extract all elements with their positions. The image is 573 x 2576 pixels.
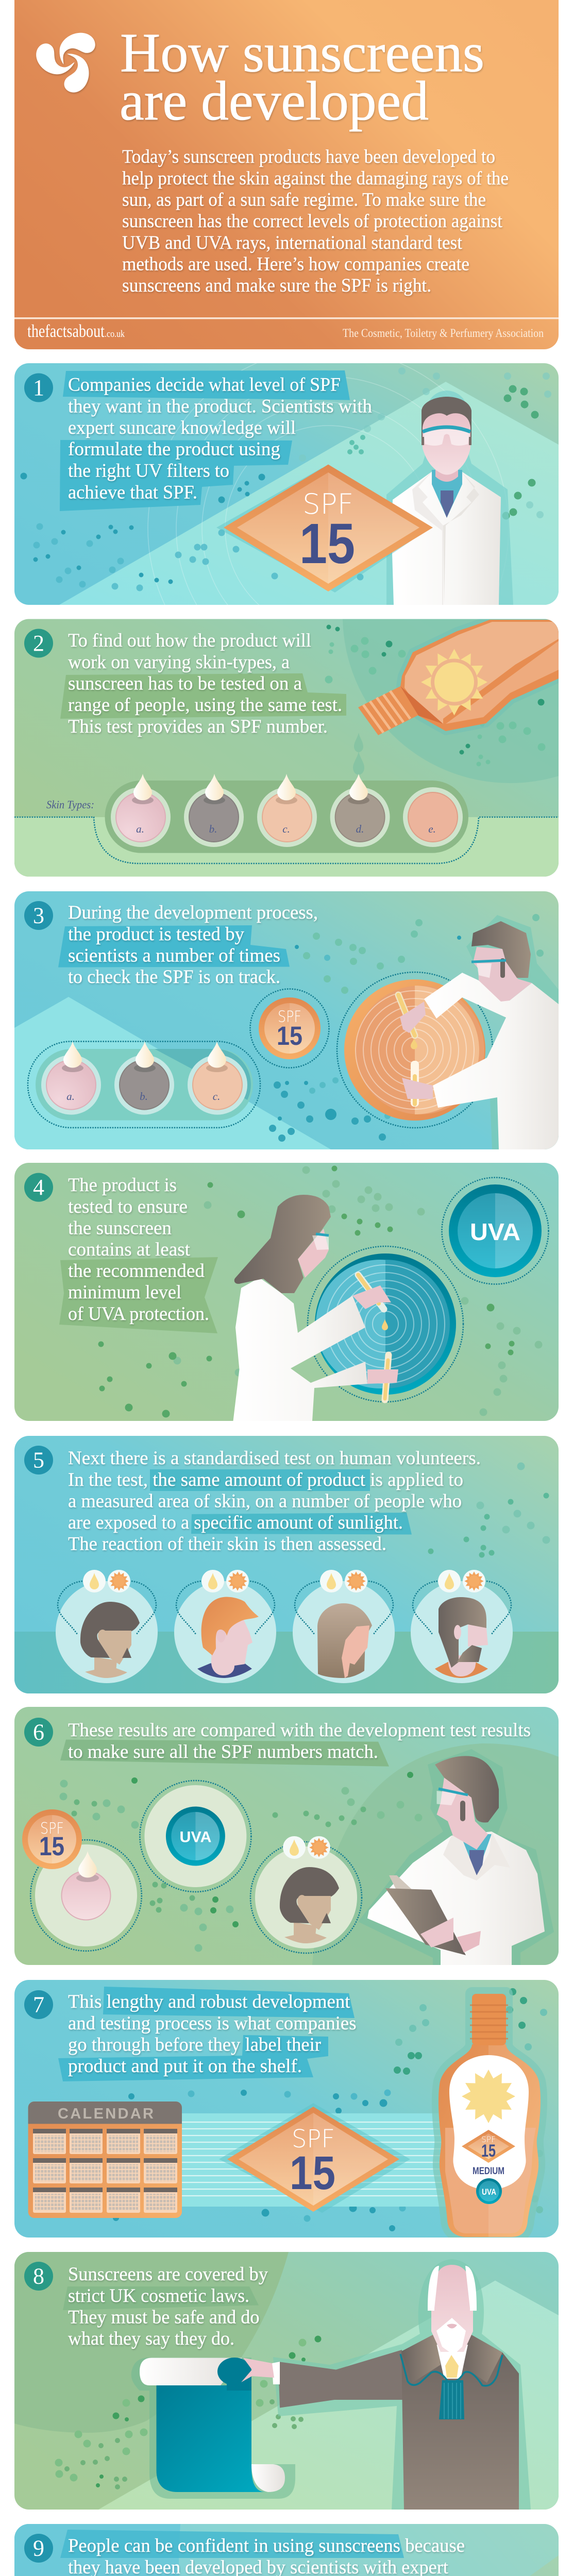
step 8 text: They must be safe and do xyxy=(68,2307,260,2328)
step 7 text: product and put it on the shelf. xyxy=(68,2056,302,2077)
SPF 15 badge: SPF xyxy=(40,1820,64,1838)
skin sample tray xyxy=(28,1041,260,1128)
dots xyxy=(24,371,548,588)
number badge 1: 1 xyxy=(33,375,44,400)
test disk xyxy=(308,1246,463,1402)
sample d: d. xyxy=(356,823,364,835)
panel: step 8 xyxy=(14,2252,559,2510)
panel: step 3 xyxy=(14,891,567,1149)
sample b xyxy=(114,1041,174,1115)
SPF 15 badge xyxy=(250,989,329,1067)
step 9 text: People can be confident in using sunscreens because xyxy=(68,2535,465,2556)
step 2 text: To find out how the product will xyxy=(68,630,311,651)
UVA sample: UVA xyxy=(179,1829,211,1845)
sunscreen bottle xyxy=(439,1994,541,2237)
light mountain background xyxy=(14,997,331,1149)
SPF 15 diamond: SPF xyxy=(292,2125,335,2154)
panel: step 5 xyxy=(14,1436,559,1693)
number badge 2: 2 xyxy=(33,631,44,656)
SPF 15 badge xyxy=(22,1809,82,1869)
intro text: help protect the skin against the damaging rays of the xyxy=(122,168,509,189)
label xyxy=(449,2055,529,2190)
dots xyxy=(273,918,540,1138)
panel: step 2 xyxy=(14,619,559,877)
stripes xyxy=(182,2113,450,2207)
number badge 1 xyxy=(24,373,53,402)
step 4 text: minimum level xyxy=(68,1282,181,1303)
scientist with clipboard xyxy=(358,1749,554,1965)
volunteer 4 xyxy=(411,1570,513,1683)
text highlights xyxy=(150,1469,412,1534)
darker arc xyxy=(343,619,559,783)
drips xyxy=(353,733,364,775)
UVA badge: UVA xyxy=(470,1218,520,1245)
step 2 text: work on varying skin-types, a xyxy=(68,652,290,673)
sample c: c. xyxy=(282,823,290,835)
step 8 text: Sunscreens are covered by xyxy=(68,2264,268,2285)
sunscreen bottle: SPF xyxy=(481,2134,496,2144)
number badge 3: 3 xyxy=(33,903,44,928)
step 1 text: they want in the product. Scientists with xyxy=(68,396,372,417)
number badge 2 xyxy=(24,629,53,657)
step 4 text: tested to ensure xyxy=(68,1196,188,1217)
UVA badge xyxy=(442,1178,548,1284)
step 1 text: achieve that SPF. xyxy=(68,482,197,503)
sample c: c. xyxy=(213,1090,220,1103)
panel: step 6 xyxy=(14,1707,559,1965)
number badge 3 xyxy=(24,901,53,930)
intro text: UVB and UVA rays, international standard test xyxy=(122,232,463,253)
step 6 text xyxy=(68,1720,531,1762)
dots xyxy=(116,1992,544,2228)
step 1 text xyxy=(68,375,372,503)
step 7 text: go through before they label their xyxy=(68,2035,321,2056)
step 4 text: of UVA protection. xyxy=(68,1303,209,1325)
sunscreen bottle: 15 xyxy=(481,2141,496,2161)
calendar: CALENDAR xyxy=(58,2106,154,2122)
icon: sun swirl logo xyxy=(31,33,96,97)
darker arc xyxy=(312,1743,559,1965)
title xyxy=(120,22,484,132)
scientist pipetting xyxy=(233,1195,398,1421)
text highlight xyxy=(60,2530,404,2558)
skin types label: Skin Types: xyxy=(46,798,94,811)
sample a xyxy=(41,1041,101,1115)
sample b: b. xyxy=(140,1090,148,1103)
month cells xyxy=(33,2129,177,2213)
text highlight xyxy=(63,2286,259,2310)
skin sample tray xyxy=(105,774,468,853)
header panel xyxy=(14,0,559,349)
step 3 text xyxy=(68,902,318,988)
intro text: sunscreen has the correct levels of protection against xyxy=(122,211,503,232)
icon: sunscreen tube xyxy=(358,620,559,735)
dots xyxy=(63,1775,418,1948)
text highlight xyxy=(59,1257,218,1333)
step 1 text: Companies decide what level of SPF xyxy=(68,375,341,396)
step 5 text: a measured area of skin, on a number of people who xyxy=(68,1491,462,1512)
panel: step 1 xyxy=(14,363,559,605)
sample c xyxy=(188,1041,247,1115)
light beam xyxy=(14,2524,230,2576)
step 4 text: contains at least xyxy=(68,1239,191,1260)
text highlight xyxy=(60,370,350,511)
step 5 text: In the test, the same amount of product is applied to xyxy=(68,1469,463,1490)
test disk xyxy=(337,972,493,1128)
volunteer 3 xyxy=(293,1570,395,1683)
dots xyxy=(59,2339,318,2487)
number badge 7 xyxy=(24,1990,53,2019)
step 3 text: to check the SPF is on track. xyxy=(68,967,280,988)
dots xyxy=(431,1466,546,1555)
brand: thefactsabout.co.uk: thefactsabout xyxy=(27,321,105,341)
step 4 text xyxy=(68,1175,209,1325)
number badge 4 xyxy=(24,1173,53,1202)
number badge 8: 8 xyxy=(33,2264,44,2289)
scroll xyxy=(131,2358,295,2499)
SPF 15 diamond xyxy=(219,2103,410,2213)
SPF 15 diamond: 15 xyxy=(299,512,355,575)
step 8 text: what they say they do. xyxy=(68,2328,234,2349)
step 6 text: These results are compared with the development test results xyxy=(68,1720,531,1741)
panel: step 4 xyxy=(14,1163,559,1421)
volunteer sample xyxy=(250,1836,362,1953)
SPF 15 badge: 15 xyxy=(39,1832,64,1861)
step 1 text: formulate the product using xyxy=(68,439,280,460)
dots xyxy=(101,1168,538,1414)
lighter band xyxy=(14,817,559,877)
step 4 text: the recommended xyxy=(68,1261,205,1282)
number badge 6: 6 xyxy=(33,1720,44,1744)
intro text: sun, as part of a sun safe regime. To make sure the xyxy=(122,190,486,211)
scientist with goggles xyxy=(386,391,513,605)
step 4 text: the sunscreen xyxy=(68,1217,172,1239)
step 1 text: the right UV filters to xyxy=(68,461,229,481)
SPF 15 badge: 15 xyxy=(277,1021,302,1050)
step 9 text xyxy=(68,2535,465,2576)
dots xyxy=(329,627,542,764)
number badge 4: 4 xyxy=(33,1175,44,1200)
step 7 text xyxy=(68,1991,357,2077)
SPF 15 diamond: SPF xyxy=(302,488,353,520)
step 7 text: This lengthy and robust development xyxy=(68,1991,350,2012)
step 8 text xyxy=(68,2264,268,2349)
SPF 15 badge: SPF xyxy=(278,1008,301,1026)
step 8 text: strict UK cosmetic laws. xyxy=(68,2285,249,2307)
sample e xyxy=(403,787,463,847)
intro text: Today’s sunscreen products have been developed to xyxy=(122,146,495,167)
number badge 9: 9 xyxy=(33,2536,44,2561)
volunteer 1 xyxy=(56,1570,158,1683)
UVA sample xyxy=(140,1781,251,1892)
sample b: b. xyxy=(209,823,217,835)
sunscreen bottle: UVA xyxy=(482,2187,496,2197)
calendar xyxy=(28,2102,182,2218)
step 2 text: range of people, using the same test. xyxy=(68,694,342,716)
step 3 text: During the development process, xyxy=(68,902,318,923)
text highlight xyxy=(60,1739,389,1767)
number badge 8 xyxy=(24,2262,53,2291)
step 2 text: This test provides an SPF number. xyxy=(68,716,328,737)
step 3 text: the product is tested by xyxy=(68,924,244,945)
step 2 text xyxy=(68,630,342,737)
brand: thefactsabout.co.uk: .co.uk xyxy=(105,329,125,340)
step 7 text: and testing process is what companies xyxy=(68,2013,357,2034)
sample b xyxy=(184,774,244,847)
sample a: a. xyxy=(136,823,144,835)
step 5 text: Next there is a standardised test on human volunteers. xyxy=(68,1448,481,1469)
association name: The Cosmetic, Toiletry & Perfumery Association xyxy=(343,327,544,340)
panel: step 9 xyxy=(14,2524,559,2576)
sample e: e. xyxy=(428,823,436,835)
title: are developed xyxy=(120,71,429,132)
skin sample with SPF badge xyxy=(22,1809,142,1951)
SPF 15 diamond: 15 xyxy=(290,2147,335,2199)
intro text: sunscreens and make sure the SPF is right. xyxy=(122,275,431,296)
number badge 5: 5 xyxy=(33,1448,44,1472)
lower band xyxy=(14,1632,559,1693)
judge xyxy=(241,2259,531,2510)
light mountain background xyxy=(59,382,559,605)
step 2 text: sunscreen has to be tested on a xyxy=(68,673,302,694)
SPF 15 diamond xyxy=(216,465,433,592)
sample a: a. xyxy=(66,1090,75,1103)
step 5 text: are exposed to a specific amount of sunlight. xyxy=(68,1512,403,1533)
number badge 9 xyxy=(24,2534,53,2563)
intro text xyxy=(122,146,509,296)
step 5 text: The reaction of their skin is then assessed. xyxy=(68,1533,386,1555)
sunscreen bottle: MEDIUM xyxy=(473,2166,504,2177)
title: How sunscreens xyxy=(120,22,484,83)
text highlight xyxy=(60,673,346,719)
step 3 text: scientists a number of times xyxy=(68,945,280,967)
panel: step 7 xyxy=(14,1980,559,2238)
number badge 7: 7 xyxy=(33,1992,44,2018)
darker arc xyxy=(14,2252,289,2433)
step 4 text: The product is xyxy=(68,1175,177,1196)
text highlight xyxy=(58,925,290,968)
scientist pipetting xyxy=(398,915,567,1149)
number badge 5 xyxy=(24,1446,53,1475)
step 1 text: expert suncare knowledge will xyxy=(68,417,296,438)
intro text: methods are used. Here’s how companies create xyxy=(122,254,469,275)
volunteer 2 xyxy=(174,1570,276,1683)
step 5 text xyxy=(68,1448,481,1555)
sample d xyxy=(330,774,390,847)
number badge 6 xyxy=(24,1718,53,1747)
text highlights xyxy=(58,1987,355,2081)
sample c xyxy=(257,774,317,847)
light mountain background xyxy=(98,2280,559,2510)
step 6 text: to make sure all the SPF numbers match. xyxy=(68,1741,378,1762)
sample a xyxy=(111,774,171,847)
dotted outline xyxy=(14,817,559,863)
